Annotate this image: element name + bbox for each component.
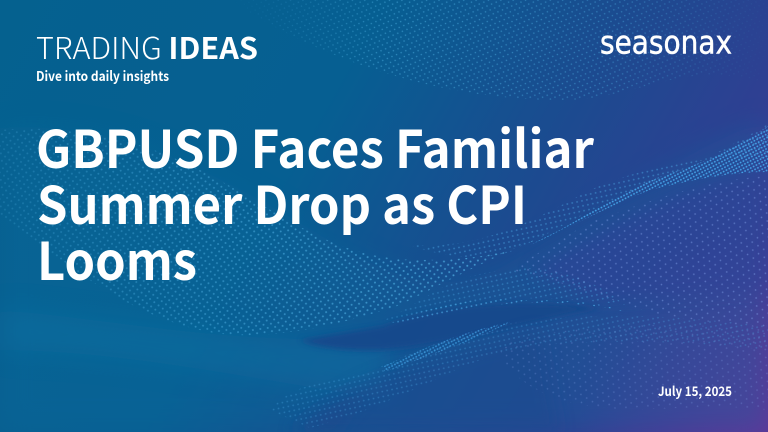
title [36,108,594,295]
wave: upper right ridge [410,124,768,257]
logo: seasonax: seasonax [600,24,732,62]
wave: top dot field [230,0,768,100]
wave: lower ridge [270,316,768,428]
wave: left and centre dot field [0,129,545,335]
title: Looms [37,220,197,295]
date: July 15, 2025 [658,381,732,400]
subheading: Dive into daily insights [36,65,169,85]
title: Summer Drop as CPI [37,164,527,239]
title: GBPUSD Faces Familiar [36,108,594,183]
wave: right purple dot field [500,176,768,410]
wave: middle ridge [384,268,625,323]
heading: trading ideas: TRADING IDEAS [36,24,258,68]
